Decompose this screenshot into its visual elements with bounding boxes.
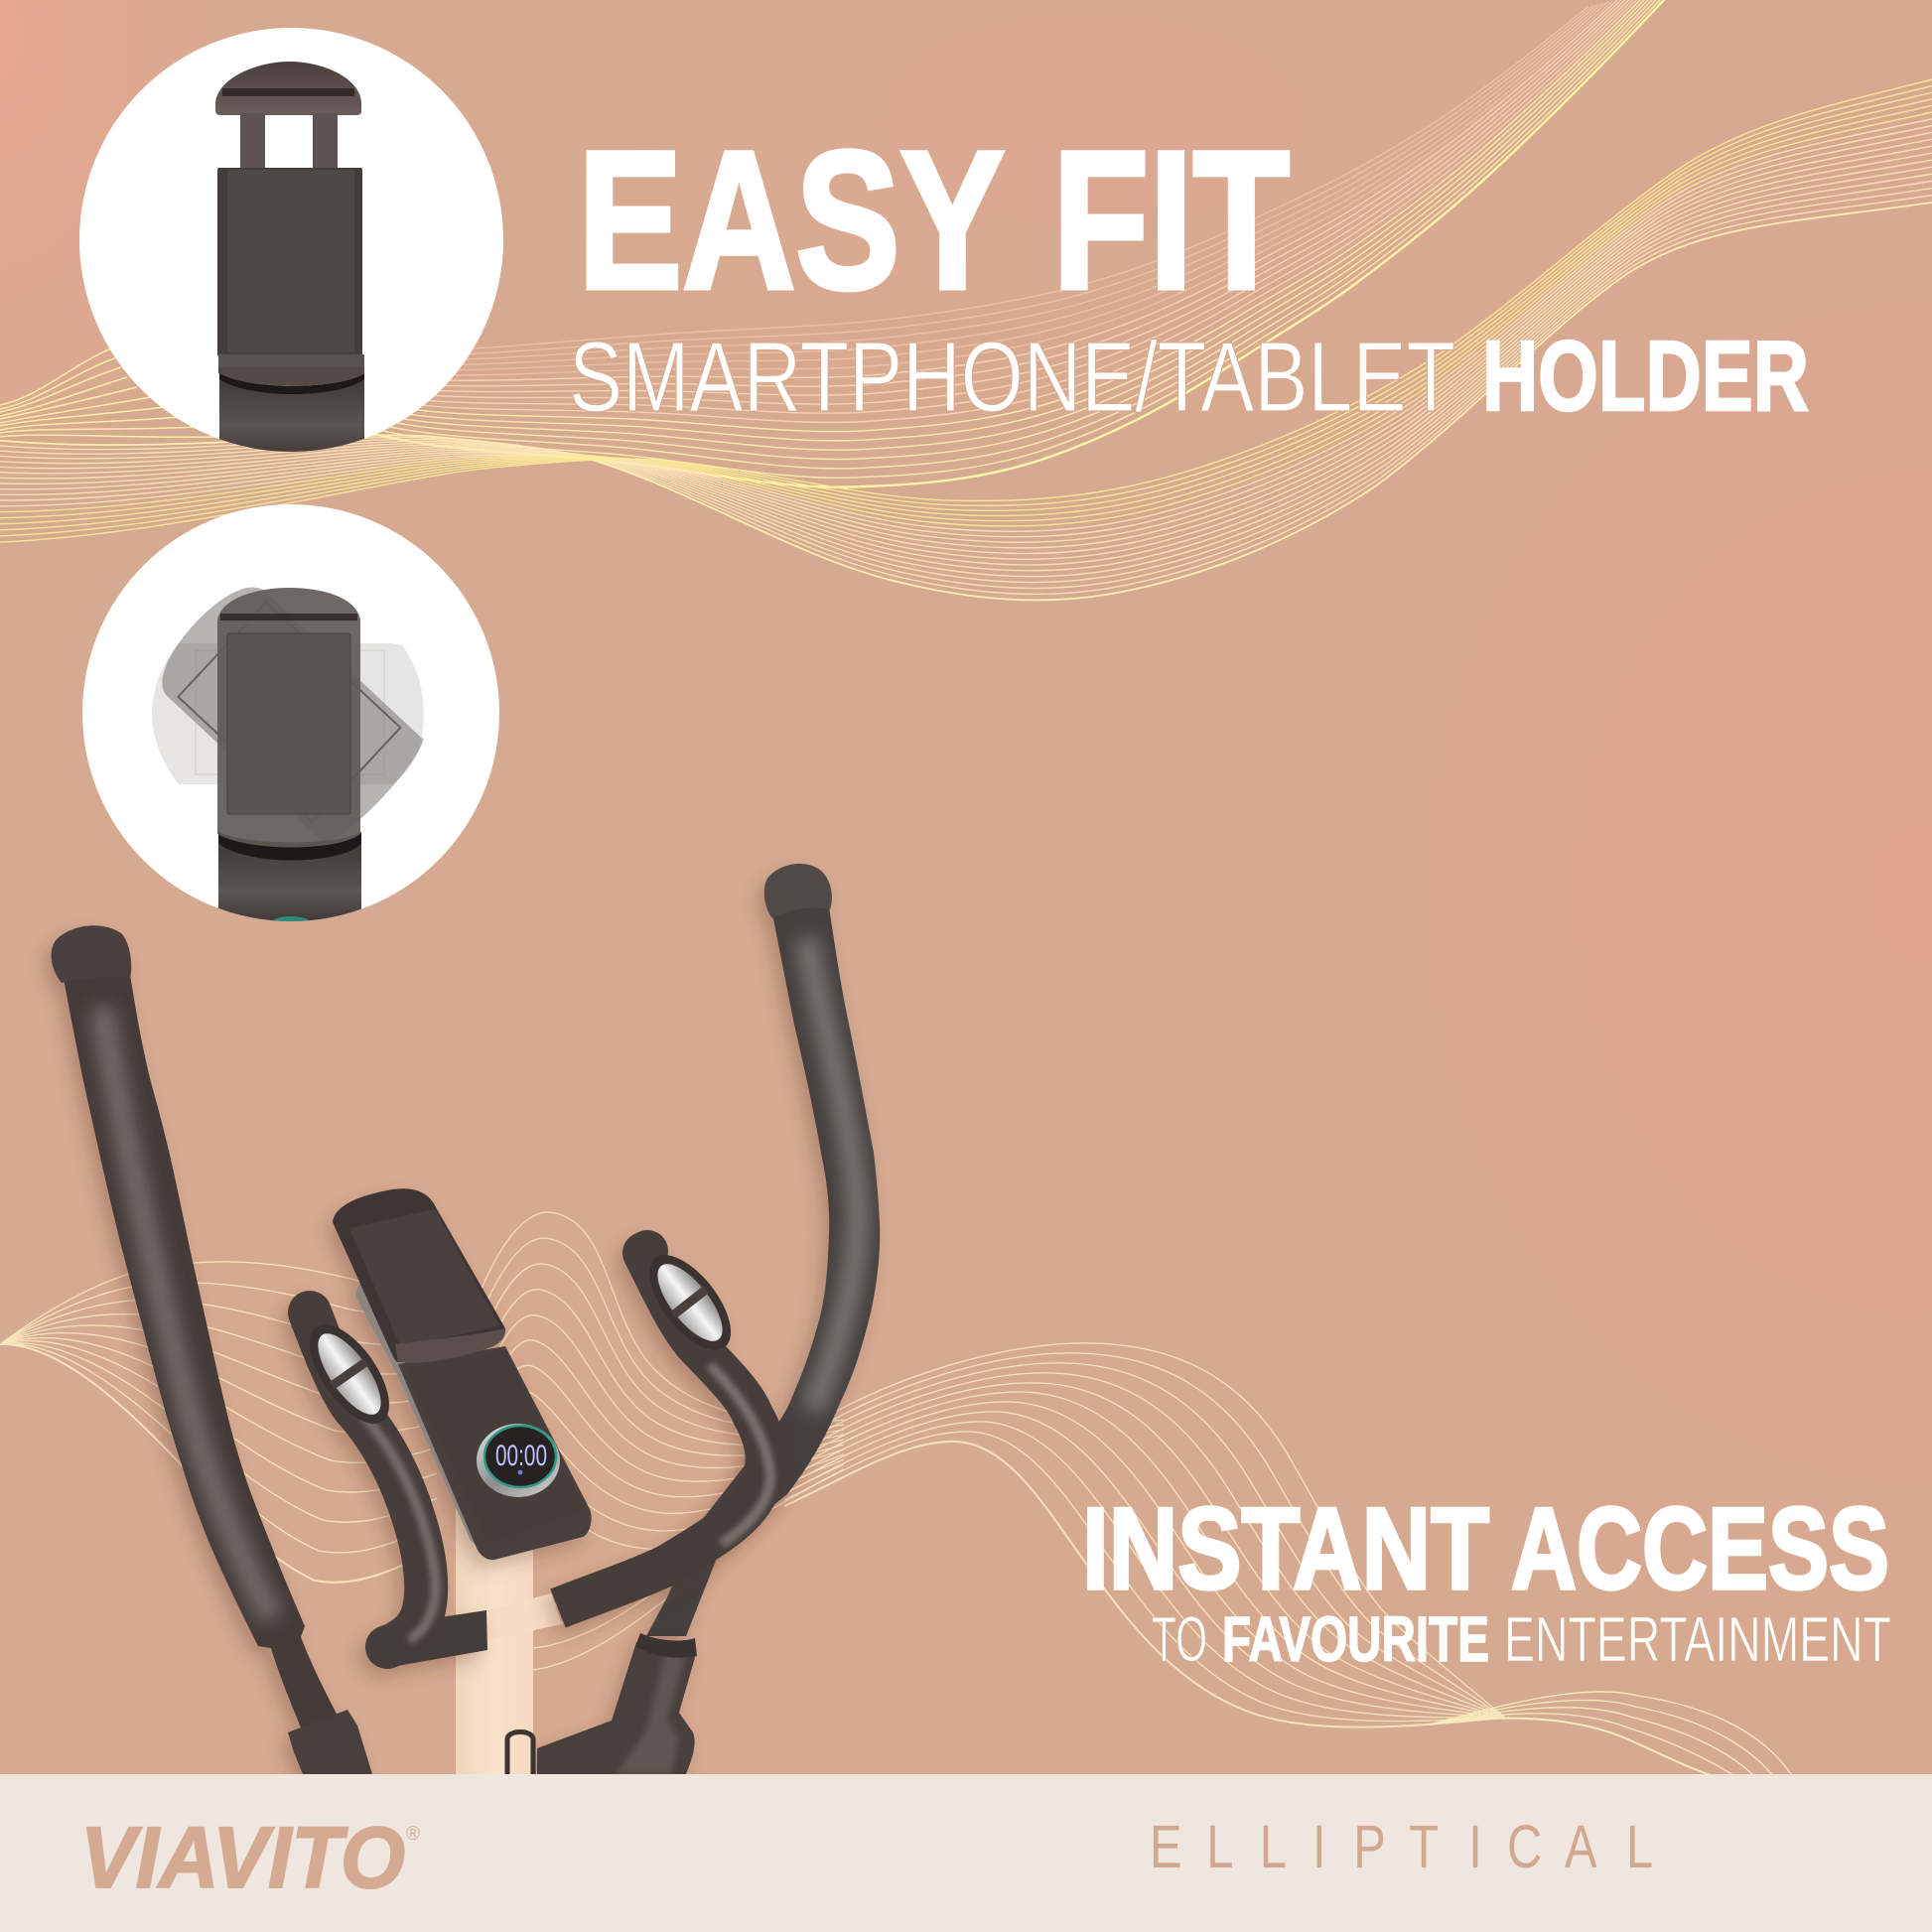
handle: far right main arm [646, 864, 880, 1636]
decorative wave: left fan rising toward the first circle [0, 347, 216, 437]
bracket loop [507, 1731, 533, 1787]
logo: viavito: ® [406, 1824, 420, 1845]
holder body [217, 168, 362, 356]
decorative wave: peak ribbon behind the console [477, 1212, 844, 1670]
display dial [477, 1424, 560, 1497]
heading: instant access: INSTANT [1082, 1483, 1489, 1613]
holder stem [218, 844, 361, 923]
icon: phone holder rotating [152, 588, 424, 921]
ghost holder horizontal [152, 643, 424, 784]
main holder front [217, 588, 360, 848]
logo: viavito: VIAVITO [80, 1810, 405, 1906]
tablet holder plate [333, 1188, 505, 1362]
heading: easy fit: FIT [1052, 110, 1290, 330]
subheading: to favourite entertainment: TO [1152, 1603, 1207, 1675]
decorative wave: lower ribbon dipping and rising to the right edge [0, 61, 1932, 669]
icon: phone holder extended [215, 62, 364, 457]
lower collar [288, 1710, 372, 1774]
console dial glimpse [272, 916, 310, 921]
console lower body [398, 1346, 592, 1560]
subheading: to favourite entertainment [1152, 1603, 1891, 1675]
chrome pulse sensor [295, 1311, 404, 1437]
grip rounded tip [373, 1610, 487, 1666]
handle end cap [764, 864, 832, 918]
subheading: smartphone tablet holder: SMARTPHONE/TABLET [569, 322, 1455, 433]
panel: holder rotation circle [82, 504, 499, 934]
holder stem [219, 379, 364, 457]
decorative wave: bottom right ribbon behind the lower heading [784, 1343, 1793, 1777]
chrome pulse sensor [634, 1241, 746, 1364]
ghost holder rotated [162, 588, 423, 824]
column: cream upright [456, 1499, 562, 1787]
holder extension posts [240, 113, 265, 169]
tablet holder lower lip [395, 1328, 505, 1363]
subheading: smartphone tablet holder: HOLDER [1482, 321, 1809, 432]
holder crescent [218, 832, 361, 860]
display readout: 00:00 [495, 1440, 547, 1472]
footer band [0, 1774, 1932, 1932]
holder top cap [215, 62, 361, 115]
subheading: to favourite entertainment: FAVOURITE [1222, 1603, 1489, 1675]
heading: instant access [1082, 1483, 1889, 1613]
panel: holder extended circle [79, 28, 503, 457]
heading: easy fit: EASY [578, 110, 1005, 330]
handle: far left main arm [52, 925, 372, 1774]
console side rim [355, 1283, 481, 1549]
crossbar [483, 1593, 562, 1640]
decorative wave: bottom left ribbon behind the handles [0, 1262, 437, 1583]
console: holder and display unit [333, 1188, 592, 1560]
handle: left grip [295, 1311, 487, 1666]
product label: elliptical: ELLIPTICAL [1150, 1813, 1653, 1880]
decorative wave: top ribbon rising to the upper right [109, 0, 1732, 487]
handle end cap [52, 925, 131, 983]
handle: right lower joint [537, 1633, 697, 1774]
holder lower lip [218, 354, 364, 367]
handle: right grip [558, 1241, 770, 1608]
